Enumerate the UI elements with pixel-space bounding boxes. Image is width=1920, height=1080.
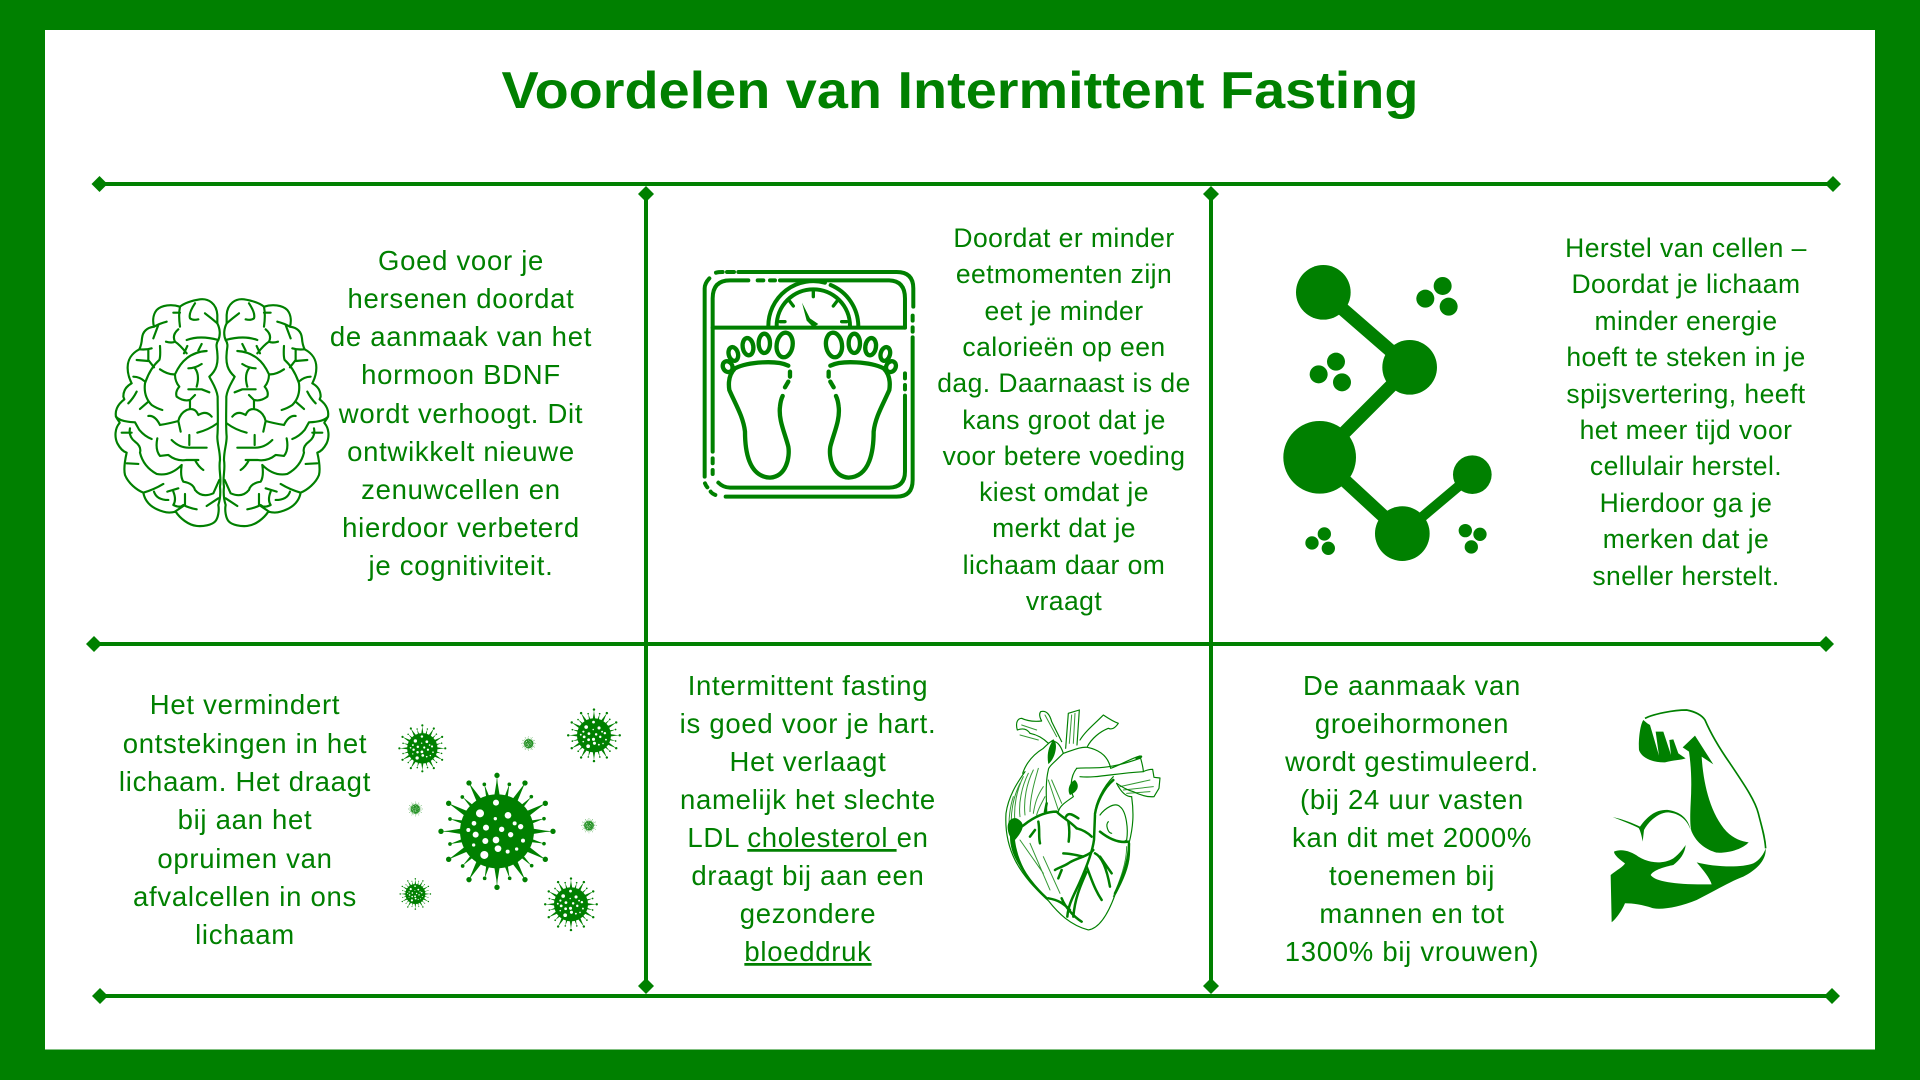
text: heart benefit: draagt bij aan een xyxy=(691,860,925,891)
text: heart benefit: is goed voor je hart. xyxy=(680,708,936,739)
text: growth hormone benefit: 1300% bij vrouwen) xyxy=(1285,936,1539,967)
text: growth hormone benefit: wordt gestimuleerd. xyxy=(1284,746,1539,777)
text: cell repair benefit: hoeft te steken in je xyxy=(1566,342,1806,372)
text: brain benefit: je cognitiviteit. xyxy=(368,550,553,581)
text: growth hormone benefit: kan dit met 2000% xyxy=(1292,822,1532,853)
icon: brain xyxy=(115,299,328,526)
text: weight benefit: kiest omdat je xyxy=(979,477,1149,507)
text: cell repair benefit: Herstel van cellen – xyxy=(1565,233,1807,263)
panel: brain health xyxy=(115,245,592,581)
text: inflammation benefit: lichaam xyxy=(195,919,295,950)
text: weight benefit: eet je minder xyxy=(984,296,1144,326)
text: inflammation benefit: lichaam. Het draagt xyxy=(119,766,371,797)
text: growth hormone benefit: mannen en tot xyxy=(1319,898,1505,929)
text: growth hormone benefit: groeihormonen xyxy=(1315,708,1509,739)
text: inflammation benefit: opruimen van xyxy=(157,843,333,874)
text: brain benefit: de aanmaak van het xyxy=(330,321,592,352)
text: brain benefit: zenuwcellen en xyxy=(361,474,561,505)
grid lines with diamond ends xyxy=(86,176,1841,1004)
text: growth hormone benefit: De aanmaak van xyxy=(1303,670,1521,701)
text: inflammation benefit: Het vermindert xyxy=(150,689,340,720)
text: cell repair benefit: sneller herstelt. xyxy=(1592,561,1780,591)
text: inflammation benefit: afvalcellen in ons xyxy=(133,881,357,912)
text: inflammation benefit: ontstekingen in het xyxy=(123,728,367,759)
panel: heart health xyxy=(680,670,1160,967)
text: heart benefit: Het verlaagt xyxy=(730,746,886,777)
text: heart benefit: Intermittent fasting xyxy=(688,670,928,701)
text: brain benefit: ontwikkelt nieuwe xyxy=(347,436,575,467)
text: weight benefit: calorieën op een xyxy=(962,332,1166,362)
text: inflammation benefit: bij aan het xyxy=(178,804,312,835)
icon: weighing scale xyxy=(705,272,913,497)
text: weight benefit: dag. Daarnaast is de xyxy=(937,368,1191,398)
panel: weight scale xyxy=(705,223,1191,616)
text: heart benefit: namelijk het slechte xyxy=(680,784,936,815)
title: Voordelen van Intermittent Fasting xyxy=(502,62,1418,120)
panel: cell repair xyxy=(1283,233,1807,591)
text: heart benefit: LDL cholesterol en xyxy=(687,822,929,853)
text: brain benefit: Goed voor je xyxy=(378,245,544,276)
icon: flexed arm xyxy=(1611,710,1766,922)
panel: inflammation xyxy=(119,689,621,950)
text: weight benefit: kans groot dat je xyxy=(962,405,1166,435)
text: heart benefit: bloeddruk xyxy=(744,936,872,967)
text: brain benefit: hersenen doordat xyxy=(347,283,575,314)
icon: anatomical heart xyxy=(1006,710,1160,930)
text: cell repair benefit: minder energie xyxy=(1594,306,1778,336)
text: weight benefit: voor betere voeding xyxy=(943,441,1185,471)
text: cell repair benefit: Doordat je lichaam xyxy=(1571,269,1801,299)
icon: viruses xyxy=(398,708,621,931)
text: weight benefit: lichaam daar om xyxy=(963,550,1165,580)
text: heart benefit: gezondere xyxy=(740,898,876,929)
text: brain benefit: hierdoor verbeterd xyxy=(342,512,580,543)
text: weight benefit: merkt dat je xyxy=(992,513,1136,543)
text: growth hormone benefit: (bij 24 uur vasten xyxy=(1300,784,1524,815)
text: cell repair benefit: cellulair herstel. xyxy=(1590,451,1782,481)
text: cell repair benefit: merken dat je xyxy=(1603,524,1769,554)
text: brain benefit: wordt verhoogt. Dit xyxy=(338,398,583,429)
icon: molecule xyxy=(1283,265,1492,561)
text: weight benefit: Doordat er minder xyxy=(953,223,1175,253)
text: cell repair benefit: het meer tijd voor xyxy=(1580,415,1792,445)
panel: growth hormone xyxy=(1284,670,1766,967)
text: brain benefit: hormoon BDNF xyxy=(361,359,561,390)
text: weight benefit: vraagt xyxy=(1026,586,1102,616)
text: growth hormone benefit: toenemen bij xyxy=(1329,860,1495,891)
text: cell repair benefit: spijsvertering, heeft xyxy=(1566,379,1806,409)
text: weight benefit: eetmomenten zijn xyxy=(956,259,1172,289)
text: cell repair benefit: Hierdoor ga je xyxy=(1600,488,1772,518)
